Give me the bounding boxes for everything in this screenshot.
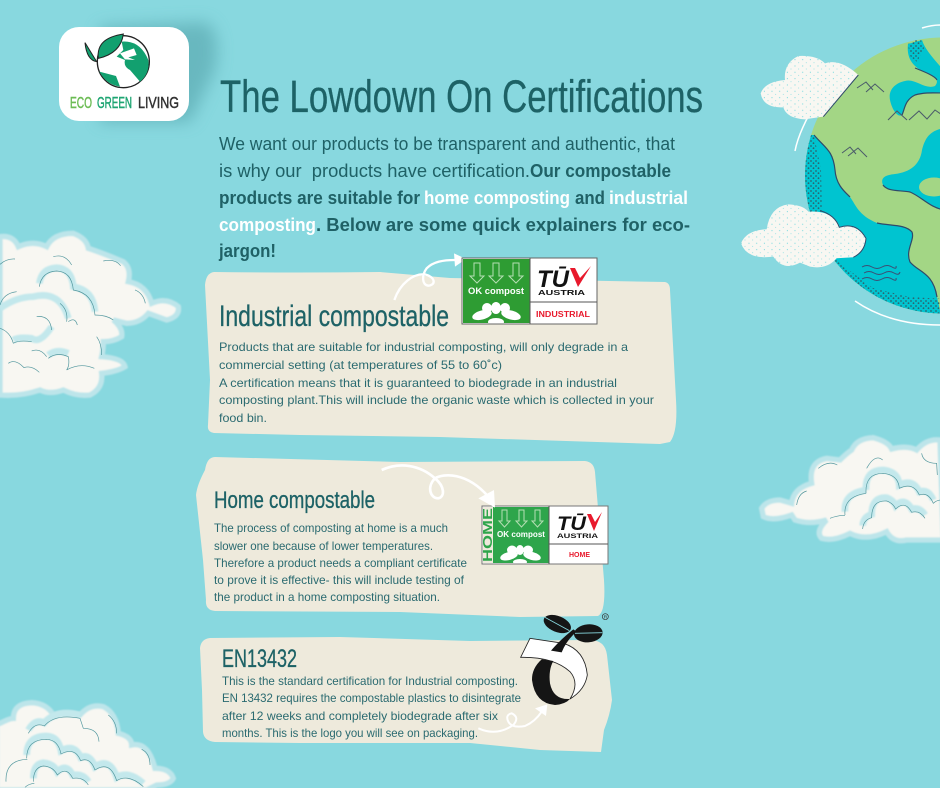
text: industrial description: commercial setting (at temperatures of 55 to 60˚c) [219,358,502,372]
text: EN13432 description: months. This is the logo you will see on packaging. [222,726,478,740]
title: The Lowdown On Certifications [220,71,703,122]
globe illustration [790,25,940,325]
intro text: . Below are some quick explainers for eco- [316,215,690,235]
text: home description [214,521,467,604]
text: industrial description: Products that are suitable for industrial composting, will only degrade in a [219,340,628,354]
certification logo: home: AUSTRIA [557,533,598,540]
intro text: products are suitable for [219,188,420,208]
panel: home compostable [196,457,604,617]
intro text: jargon! [218,241,276,261]
panel: EN13432 [200,637,612,752]
text: home description: slower one because of lower temperatures. [214,539,433,553]
arrow: to home logo [382,465,495,508]
seedling logo: R [604,615,608,621]
intro text: industrial [609,188,688,208]
cloud: upper left [0,233,179,395]
certification logo: home: OK compost [497,530,545,539]
certification logo: home [480,506,608,565]
cloud: right [762,438,940,541]
intro text: Our compostable [530,161,671,181]
certification logo: industrial: AUSTRIA [538,290,585,297]
certification logo: home: TŪ [557,514,587,535]
logo wordmark: ECO [70,95,92,112]
certification logo: home: HOME [480,508,495,562]
certification logo: industrial [462,258,597,326]
text: industrial description: food bin. [219,411,267,425]
text: EN13432 description: This is the standard certification for Industrial composting. [222,674,518,688]
text: EN13432 description [222,674,521,740]
certification logo: industrial: INDUSTRIAL [536,310,590,319]
intro text: composting [219,215,316,235]
certification logo: home: HOME [569,552,590,559]
intro text [218,134,690,261]
certification logo: industrial: OK compost [468,286,524,296]
logo wordmark: LIVING [138,95,179,112]
logo: eco green living [59,27,189,121]
text: industrial description [219,340,654,425]
intro text: is why our products have certification. [219,161,530,181]
text: home description: The process of composting at home is a much [214,521,448,535]
intro text: home composting [424,188,570,208]
arrow: to seedling logo [478,704,547,732]
heading: industrial compostable: Industrial compostable [219,300,449,333]
certification logo: industrial: TŪ [537,266,570,293]
heading: EN13432: EN13432 [222,645,297,673]
intro text: We want our products to be transparent and authentic, that [219,134,675,154]
logo wordmark [70,95,179,112]
text: industrial description: composting plant.This will include the organic waste which is collected in your [219,393,654,407]
seedling logo [521,611,608,705]
text: home description: Therefore a product needs a compliant certificate [214,556,467,570]
panel: industrial compostable [205,272,676,444]
text: EN13432 description: after 12 weeks and completely biodegrade after six [222,709,498,723]
heading: home compostable: Home compostable [214,487,375,514]
cloud: top right [761,56,858,119]
text: EN13432 description: EN 13432 requires the compostable plastics to disintegrate [222,691,521,705]
text: home description: the product in a home composting situation. [214,590,440,604]
logo shadow [100,22,217,122]
arrow: to industrial logo [394,253,466,300]
intro text: and [575,188,605,208]
text: industrial description: A certification means that it is guaranteed to biodegrade in an industrial [219,376,617,390]
logo wordmark: GREEN [97,95,132,112]
text: home description: to prove it is effective- this will include testing of [214,573,465,587]
icon: globe with leaves [85,34,149,88]
cloud: middle right of globe [741,204,866,267]
cloud: bottom left [0,703,173,788]
